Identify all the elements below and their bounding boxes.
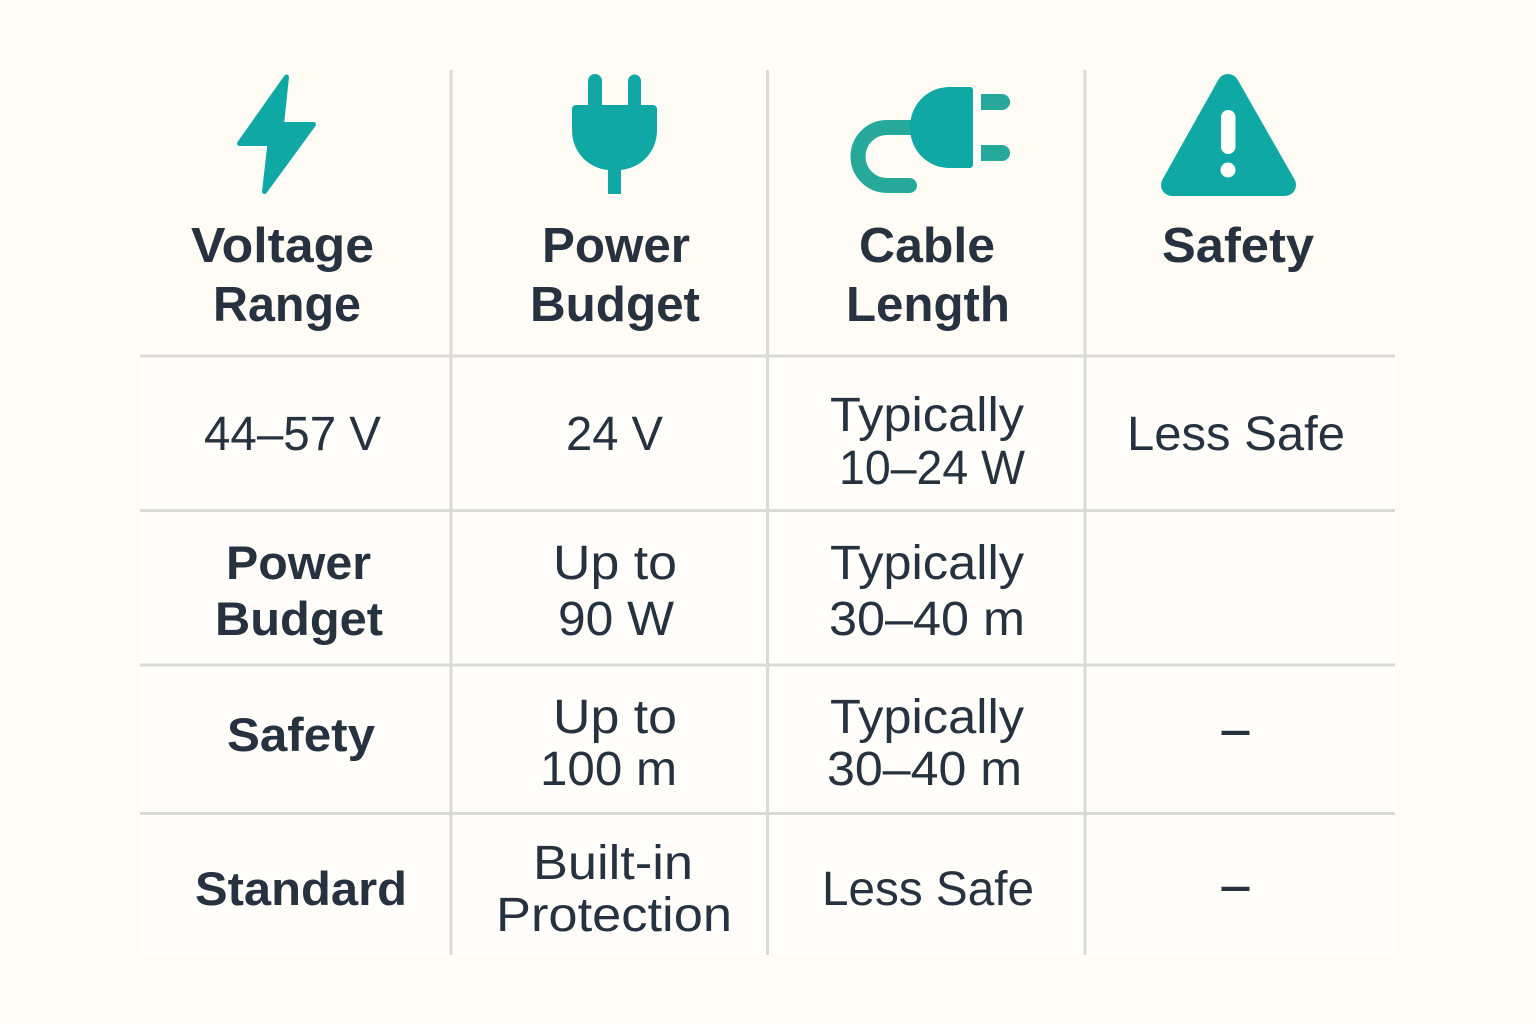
row 4: Less Safe bbox=[822, 863, 1034, 916]
row 2: 90 W bbox=[558, 593, 675, 646]
icon: cable with plug bbox=[858, 87, 1010, 186]
row 4 bbox=[195, 837, 1249, 942]
row 2: Power bbox=[226, 536, 371, 589]
row 3: – bbox=[1222, 703, 1249, 756]
column heading: Power Budget: Power bbox=[542, 219, 690, 273]
row 3: Safety bbox=[227, 708, 375, 761]
row 3: 100 m bbox=[540, 743, 677, 796]
column heading: Power Budget: Budget bbox=[530, 278, 700, 332]
column heading: Cable Length: Length bbox=[846, 278, 1010, 332]
column heading: Safety: Safety bbox=[1162, 219, 1314, 273]
row 1: Typically bbox=[830, 389, 1024, 442]
row 3: Typically bbox=[830, 691, 1024, 744]
row 4: – bbox=[1222, 859, 1249, 912]
row 4: Protection bbox=[496, 889, 732, 942]
column heading: Power Budget bbox=[530, 219, 700, 332]
icon: lightning bolt bbox=[240, 77, 314, 192]
row 2: 30–40 m bbox=[829, 593, 1025, 646]
row 3: Up to bbox=[553, 691, 677, 744]
icon: warning triangle bbox=[1172, 85, 1285, 185]
row 2: Budget bbox=[215, 592, 383, 645]
row 3: 30–40 m bbox=[827, 743, 1022, 796]
row 1: 44–57 V bbox=[204, 408, 381, 461]
row 1 bbox=[204, 389, 1345, 495]
row 2: Typically bbox=[830, 537, 1024, 590]
column heading: Voltage Range: Range bbox=[213, 278, 361, 332]
row 3 bbox=[227, 691, 1249, 796]
table body panel bbox=[140, 356, 1395, 955]
column heading: Cable Length: Cable bbox=[859, 219, 995, 273]
row 1: 10–24 W bbox=[839, 442, 1026, 495]
row 4: Built-in bbox=[533, 837, 693, 890]
column heading: Voltage Range: Voltage bbox=[191, 219, 374, 273]
icon: power plug bbox=[572, 74, 657, 194]
row 1: Less Safe bbox=[1127, 408, 1345, 461]
row 2 bbox=[215, 536, 1025, 646]
column heading: Voltage Range bbox=[191, 219, 374, 332]
column heading: Cable Length bbox=[846, 219, 1010, 332]
row 4: Standard bbox=[195, 862, 407, 915]
row 1: 24 V bbox=[566, 408, 663, 461]
row 2: Up to bbox=[553, 537, 677, 590]
